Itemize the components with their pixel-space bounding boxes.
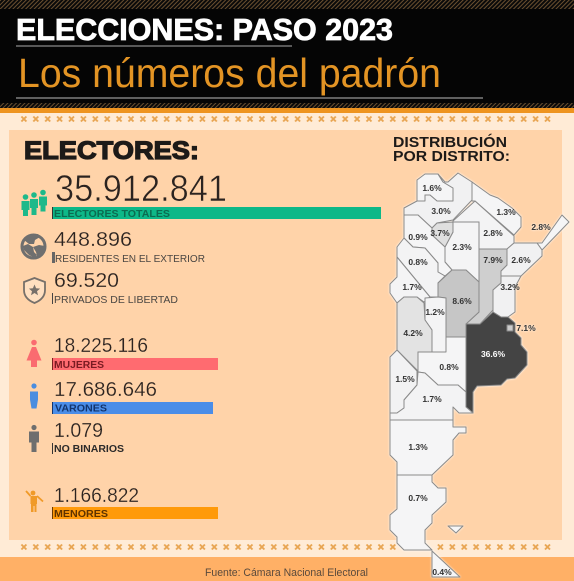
- district percentage labels: 3.0%: [431, 206, 451, 216]
- main panel: [9, 130, 562, 540]
- district percentage labels: 2.8%: [531, 222, 551, 232]
- district: Chubut: [390, 420, 466, 475]
- district: San Juan: [390, 257, 430, 303]
- district: Tierra del Fuego: [432, 551, 460, 577]
- stat: varones: [52, 378, 213, 414]
- icon: woman: [26, 340, 42, 367]
- heading: distribución por distrito: DISTRIBUCIÓN: [393, 133, 507, 151]
- district percentage labels: 1.3%: [496, 207, 516, 217]
- stat: electores totales: [52, 168, 381, 220]
- district: Neuquén: [390, 350, 417, 413]
- district percentage labels: 0.4%: [432, 567, 452, 577]
- footer band: [0, 557, 574, 581]
- stat: no binarios: [52, 419, 124, 455]
- icon: child: [26, 491, 43, 512]
- district: La Rioja: [397, 238, 445, 297]
- map of Argentina by district: [390, 173, 569, 577]
- stat: residentes en el exterior: 448.896: [54, 228, 132, 251]
- stat: privados de libertad: [52, 269, 178, 306]
- heading: electores: ELECTORES:: [24, 137, 199, 165]
- district percentage labels: 36.6%: [481, 349, 505, 359]
- icon: shield with star: [24, 278, 45, 303]
- district percentage labels: 7.9%: [483, 255, 503, 265]
- district: Catamarca: [404, 215, 452, 276]
- footer band: Fuente: Cámara Nacional Electoral: [205, 567, 368, 579]
- district: Santa Fe: [466, 249, 507, 324]
- district: Chaco: [453, 201, 514, 249]
- icon: globe: [22, 234, 45, 258]
- district percentage labels: 0.9%: [408, 232, 428, 242]
- district: Santiago del Estero: [445, 222, 479, 282]
- district percentage labels: 4.2%: [403, 328, 423, 338]
- bottom row of x marks: [18, 541, 552, 553]
- stat: varones: VARONES: [55, 402, 107, 414]
- Islas Malvinas: [448, 526, 463, 533]
- district percentage labels: 0.8%: [439, 362, 459, 372]
- district: Tucumán: [432, 222, 453, 247]
- stat: menores: MENORES: [54, 508, 108, 520]
- district percentage labels: 3.2%: [500, 282, 520, 292]
- header band: [0, 0, 574, 113]
- stat: no binarios: NO BINARIOS: [54, 443, 124, 455]
- stat: privados de libertad: 69.520: [54, 269, 119, 292]
- stat: electores totales: 35.912.841: [55, 168, 227, 209]
- district percentage labels: 1.7%: [402, 282, 422, 292]
- stat: mujeres: 18.225.116: [54, 334, 148, 357]
- district: Río Negro: [390, 372, 473, 420]
- district percentage labels: 2.3%: [452, 242, 472, 252]
- top row of x marks: [18, 113, 552, 125]
- district: Córdoba: [438, 270, 479, 337]
- icon: people: [22, 190, 47, 216]
- district percentage labels: 1.3%: [408, 442, 428, 452]
- district: Mendoza: [397, 297, 432, 371]
- district percentage labels: 1.5%: [395, 374, 415, 384]
- stat: privados de libertad: PRIVADOS DE LIBERTAD: [54, 294, 178, 306]
- district percentage labels: 0.7%: [408, 493, 428, 503]
- district: Santa Cruz: [390, 475, 446, 550]
- stat: mujeres: [52, 334, 218, 371]
- patch behind the southern tip of the map: [396, 540, 436, 557]
- title: Elecciones PASO 2023: ELECCIONES: PASO 2023: [16, 12, 393, 47]
- district: Formosa: [472, 182, 521, 235]
- district: San Luis: [425, 297, 446, 352]
- district percentage labels: 7.1%: [516, 323, 536, 333]
- stat: residentes en el exterior: RESIDENTES EN EL EXTERIOR: [55, 253, 205, 265]
- icon: non-binary person: [29, 425, 39, 452]
- district percentage labels: 1.7%: [422, 394, 442, 404]
- district: La Pampa: [418, 337, 466, 392]
- district: Corrientes: [501, 243, 542, 276]
- district percentage labels: 2.6%: [511, 255, 531, 265]
- district: Entre Ríos: [493, 276, 521, 317]
- district: Buenos Aires: [466, 312, 527, 413]
- stat: menores: [52, 484, 218, 520]
- stat: no binarios: 1.079: [54, 419, 103, 442]
- district percentage labels: 1.6%: [422, 183, 442, 193]
- district percentage labels: 2.8%: [483, 228, 503, 238]
- stat: mujeres: MUJERES: [54, 359, 104, 371]
- district: Jujuy: [417, 174, 453, 201]
- district percentage labels: [395, 183, 551, 577]
- district percentage labels: 3.7%: [430, 228, 450, 238]
- icon: man: [30, 383, 38, 408]
- stat: residentes en el exterior: [52, 228, 205, 265]
- district: Salta: [404, 173, 472, 228]
- heading: distribución por distrito: [393, 133, 510, 165]
- district percentage labels: 1.2%: [425, 307, 445, 317]
- subtitle: Los números del padrón: Los números del padrón: [18, 50, 441, 96]
- stat: electores totales: ELECTORES TOTALES: [54, 208, 170, 220]
- district: CABA: [507, 325, 513, 331]
- district percentage labels: 8.6%: [452, 296, 472, 306]
- heading: distribución por distrito: POR DISTRITO:: [393, 149, 510, 165]
- district percentage labels: 0.8%: [408, 257, 428, 267]
- stat: menores: 1.166.822: [54, 484, 139, 507]
- district: Misiones: [537, 215, 569, 250]
- stat: varones: 17.686.646: [54, 378, 157, 401]
